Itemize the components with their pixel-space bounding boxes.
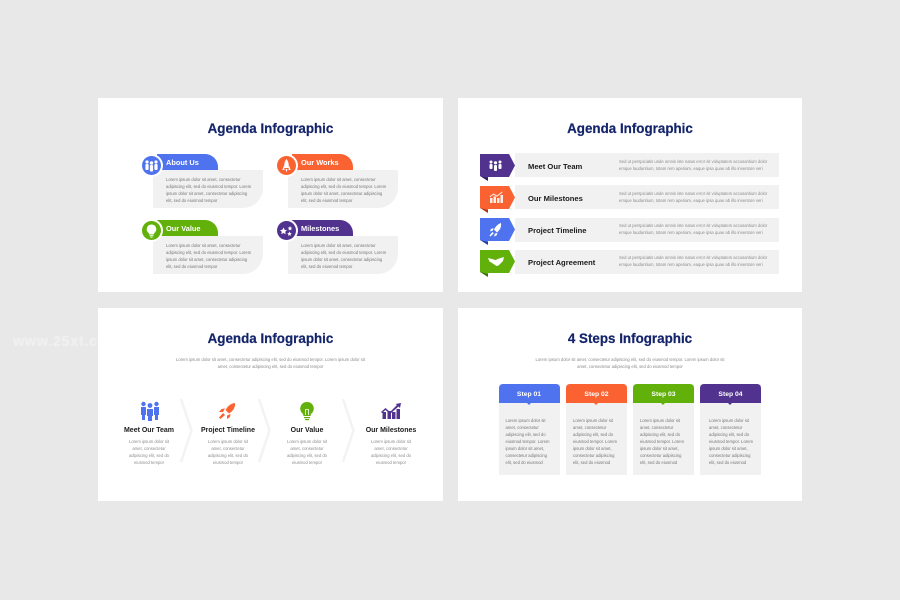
intro text: Lorem ipsum dolor sit amet, consectetur adipiscing elit, sed do eiusmod tempor. Lorem ipsum dolor sit xyxy=(536,356,724,362)
row: Our Milestones: Sed ut perspiciatis unde omnis iste natus error sit voluptatem accusantium dolor xyxy=(619,190,767,196)
card: Step 01: Lorem ipsum dolor sit xyxy=(506,418,546,423)
card: Step 01: elit, sed do eiusmod xyxy=(506,460,543,465)
card: Our Value: elit, sed do eiusmod tempor xyxy=(166,264,217,269)
card: Our Value: Our Value xyxy=(166,224,201,233)
row: Meet Our Team: Sed ut perspiciatis unde omnis iste natus error sit voluptatem accusantium dolor xyxy=(619,158,767,164)
column: Meet Our Team: amet, consectetur xyxy=(132,446,166,450)
row: Our Milestones: emque laudantium, totam rem aperiam, eaque ipsa quae ab illo inventore veri xyxy=(619,198,763,203)
card: Step 03 xyxy=(633,384,694,475)
heading: 4 Steps Infographic xyxy=(568,331,692,346)
card: Step 02: adipiscing elit, sed do xyxy=(573,432,613,437)
card: Step 03: Lorem ipsum dolor sit xyxy=(640,418,680,423)
card: Step 03: Step 03 xyxy=(651,391,676,398)
row: Project Agreement: emque laudantium, totam rem aperiam, eaque ipsa quae ab illo inventore veri xyxy=(619,262,763,267)
column: Our Milestones: amet, consectetur xyxy=(374,446,408,450)
card: Step 04: adipiscing elit, sed do xyxy=(709,432,749,437)
column: Project Timeline: Lorem ipsum dolor sit xyxy=(208,438,248,444)
card: Step 02: Lorem ipsum dolor sit xyxy=(573,418,613,423)
column: Our Value: adipiscing elit, sed do xyxy=(287,452,327,458)
card: Step 01: ipsum dolor sit amet, xyxy=(506,446,544,451)
card: Our Value: ipsum dolor sit amet, consectetur adipiscing xyxy=(166,257,247,262)
card: Step 03: eiusmod tempor. Lorem xyxy=(640,439,684,444)
column: Our Milestones: Our Milestones xyxy=(366,427,416,434)
card: Our Works: Lorem ipsum dolor sit amet, consectetur xyxy=(301,177,375,182)
panel: agenda process columns xyxy=(98,308,443,501)
column: Meet Our Team: adipiscing elit, sed do xyxy=(129,452,169,458)
watermark: www.25xt.c xyxy=(13,334,98,350)
column: Our Milestones: eiusmod tempor xyxy=(376,460,406,464)
row: Meet Our Team: Meet Our Team xyxy=(528,162,582,170)
card: Step 04 xyxy=(700,384,761,475)
row: Project Agreement xyxy=(480,250,779,277)
card: Step 04: amet, consectetur xyxy=(709,425,742,430)
card: About Us: adipiscing elit, sed do eiusmod tempor. Lorem xyxy=(166,184,251,189)
panel: agenda ribbon rows xyxy=(458,98,802,292)
row: Meet Our Team xyxy=(480,153,779,181)
card: Step 02: ipsum dolor sit amet, xyxy=(573,446,612,451)
panel: 4 steps xyxy=(458,308,802,501)
card: Step 02: elit, sed do eiusmod xyxy=(573,460,610,465)
card: Our Value: Lorem ipsum dolor sit amet, consectetur xyxy=(166,243,240,248)
column: Our Value: amet, consectetur xyxy=(290,446,324,450)
column: Meet Our Team xyxy=(124,402,174,465)
column: Meet Our Team: eiusmod tempor xyxy=(134,460,164,464)
intro text xyxy=(176,356,365,369)
card: About Us: elit, sed do eiusmod tempor xyxy=(166,198,217,203)
intro text: amet, consectetur adipiscing elit, sed do eiusmod tempor xyxy=(577,364,683,368)
intro text xyxy=(536,356,724,369)
column: Our Value: eiusmod tempor xyxy=(292,460,322,464)
column: Project Timeline xyxy=(201,403,255,465)
card: Milestones: Milestones xyxy=(301,224,339,233)
row: Our Milestones xyxy=(480,185,779,213)
card: Step 04: consectetur adipiscing xyxy=(709,453,750,458)
card: Step 01 xyxy=(498,384,560,475)
card: Step 02: amet, consectetur xyxy=(573,425,606,430)
card: Step 03: amet, consectetur xyxy=(640,425,673,430)
row: Project Timeline: emque laudantium, totam rem aperiam, eaque ipsa quae ab illo inventore veri xyxy=(619,230,763,235)
card: Step 04: Step 04 xyxy=(718,391,743,398)
row: Project Agreement: Project Agreement xyxy=(528,258,595,267)
column: Our Milestones xyxy=(366,403,416,465)
column: Our Value xyxy=(287,402,327,465)
row: Meet Our Team: emque laudantium, totam rem aperiam, eaque ipsa quae ab illo inventore veri xyxy=(619,166,763,171)
card: Step 04: eiusmod tempor. Lorem xyxy=(709,439,753,444)
card: Step 02: consectetur adipiscing xyxy=(573,453,614,458)
card: Step 03: ipsum dolor sit amet, xyxy=(640,446,679,451)
card: Our Works: Our Works xyxy=(301,158,339,167)
heading: Agenda Infographic xyxy=(208,331,333,346)
column: Project Timeline: amet, consectetur xyxy=(211,446,245,450)
panel: agenda cards xyxy=(98,98,443,292)
card: Step 02: Step 02 xyxy=(584,391,609,398)
column: Our Milestones: Lorem ipsum dolor sit xyxy=(371,438,411,444)
card: About Us: ipsum dolor sit amet, consectetur adipiscing xyxy=(166,191,247,196)
column: Project Timeline: adipiscing elit, sed do xyxy=(208,452,248,458)
card: Our Value xyxy=(142,220,263,274)
card: About Us: About Us xyxy=(166,158,199,167)
card: Our Works xyxy=(277,154,398,208)
card: Milestones xyxy=(277,220,398,274)
column: Our Milestones: adipiscing elit, sed do xyxy=(371,452,411,458)
card: Step 03: adipiscing elit, sed do xyxy=(640,432,680,437)
card: Step 03: elit, sed do eiusmod xyxy=(640,460,677,465)
card: Milestones: elit, sed do eiusmod tempor xyxy=(301,264,352,269)
card: Step 04: Lorem ipsum dolor sit xyxy=(709,418,749,423)
card: Milestones: ipsum dolor sit amet, consectetur adipiscing xyxy=(301,257,382,262)
column: Meet Our Team: Meet Our Team xyxy=(124,427,174,434)
card: Step 02 xyxy=(566,384,627,475)
chevron dividers xyxy=(180,399,354,462)
column: Our Value: Lorem ipsum dolor sit xyxy=(287,438,327,444)
card: Step 02: eiusmod tempor. Lorem xyxy=(573,439,617,444)
card: About Us: Lorem ipsum dolor sit amet, consectetur xyxy=(166,177,240,182)
card: Step 04: elit, sed do eiusmod xyxy=(709,460,746,465)
card: Step 04: ipsum dolor sit amet, xyxy=(709,446,748,451)
row: Project Agreement: Sed ut perspiciatis unde omnis iste natus error sit voluptatem accusantium dolor xyxy=(619,255,767,260)
column: Our Value: Our Value xyxy=(291,427,323,434)
intro text: amet, consectetur adipiscing elit, sed do eiusmod tempor xyxy=(218,364,323,368)
card: Milestones: Lorem ipsum dolor sit amet, consectetur xyxy=(301,243,375,248)
icon: growth chart xyxy=(381,403,401,419)
icon: rocket xyxy=(219,403,236,419)
card: Step 03: consectetur adipiscing xyxy=(640,453,681,458)
card: Our Works: elit, sed do eiusmod tempor xyxy=(301,198,352,203)
intro text: Lorem ipsum dolor sit amet, consectetur adipiscing elit, sed do eiusmod tempor. Lorem ipsum dolor sit xyxy=(176,356,365,362)
card: Our Works: ipsum dolor sit amet, consectetur adipiscing xyxy=(301,191,382,196)
card: Step 01: amet, consectetur xyxy=(506,425,539,430)
column: Project Timeline: Project Timeline xyxy=(201,427,255,434)
row: Our Milestones: Our Milestones xyxy=(528,194,583,202)
card: Step 01: consectetur adipiscing xyxy=(506,453,547,458)
card: About Us xyxy=(142,154,263,208)
heading: Agenda Infographic xyxy=(208,121,333,136)
card: Milestones: adipiscing elit, sed do eiusmod tempor. Lorem xyxy=(301,250,386,255)
card: Step 01: eiusmod tempor. Lorem xyxy=(506,439,550,444)
column: Meet Our Team: Lorem ipsum dolor sit xyxy=(129,438,169,444)
card: Step 01: adipiscing elit, sed do xyxy=(506,432,546,437)
row: Project Timeline: Project Timeline xyxy=(528,226,587,235)
column: Project Timeline: eiusmod tempor xyxy=(213,460,243,464)
card: Step 01: Step 01 xyxy=(517,391,541,398)
card: Our Works: adipiscing elit, sed do eiusmod tempor. Lorem xyxy=(301,184,386,189)
icon: team xyxy=(141,402,159,421)
card: Our Value: adipiscing elit, sed do eiusmod tempor. Lorem xyxy=(166,250,251,255)
row: Project Timeline: Sed ut perspiciatis unde omnis iste natus error sit voluptatem accusantium dolor xyxy=(619,223,767,228)
heading: Agenda Infographic xyxy=(567,121,693,136)
icon: light bulb xyxy=(300,402,314,420)
row: Project Timeline xyxy=(480,218,779,245)
